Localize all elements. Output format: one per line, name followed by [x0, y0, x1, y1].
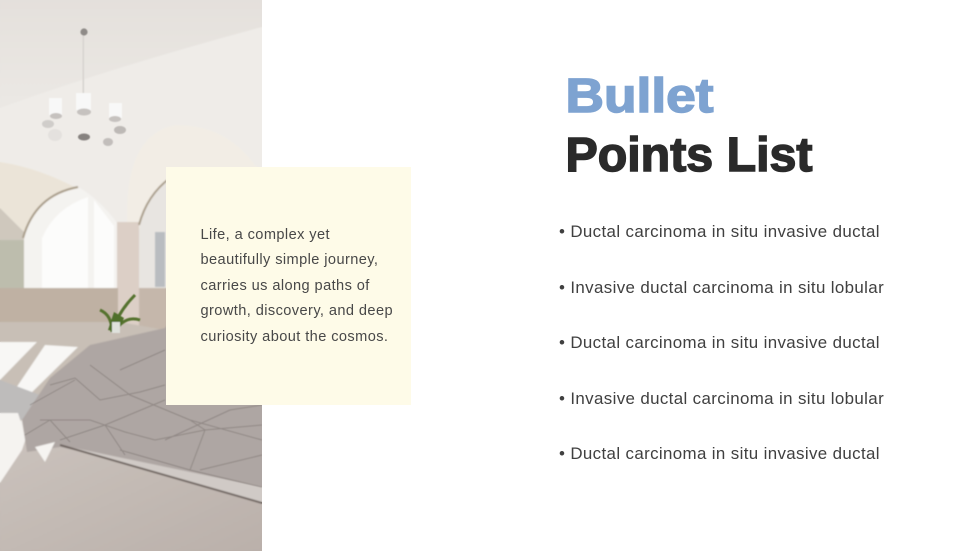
- title: Bullet Points List: [566, 70, 813, 182]
- bullet item 3: • Ductal carcinoma in situ invasive ductal: [559, 333, 880, 352]
- title line 2: Points List: [566, 129, 813, 182]
- card text: [200, 226, 393, 345]
- card text: carries us along paths of: [200, 278, 370, 294]
- card text: beautifully simple journey,: [200, 252, 378, 268]
- title line 1: Bullet: [566, 70, 714, 123]
- bullet item 2: • Invasive ductal carcinoma in situ lobular: [559, 278, 884, 296]
- plant: [100, 295, 140, 333]
- card text: Life, a complex yet: [200, 226, 330, 242]
- chandelier: [42, 28, 126, 146]
- card text: curiosity about the cosmos.: [200, 329, 388, 345]
- photo: bedroom interior with chandelier and arched windows: [0, 0, 262, 551]
- card: cream text panel: [166, 167, 411, 405]
- bullet item 4: • Invasive ductal carcinoma in situ lobular: [559, 388, 884, 408]
- bullet item 5: • Ductal carcinoma in situ invasive ductal: [559, 444, 880, 463]
- bullet item 1: • Ductal carcinoma in situ invasive ductal: [559, 222, 880, 241]
- card text: growth, discovery, and deep: [200, 303, 393, 319]
